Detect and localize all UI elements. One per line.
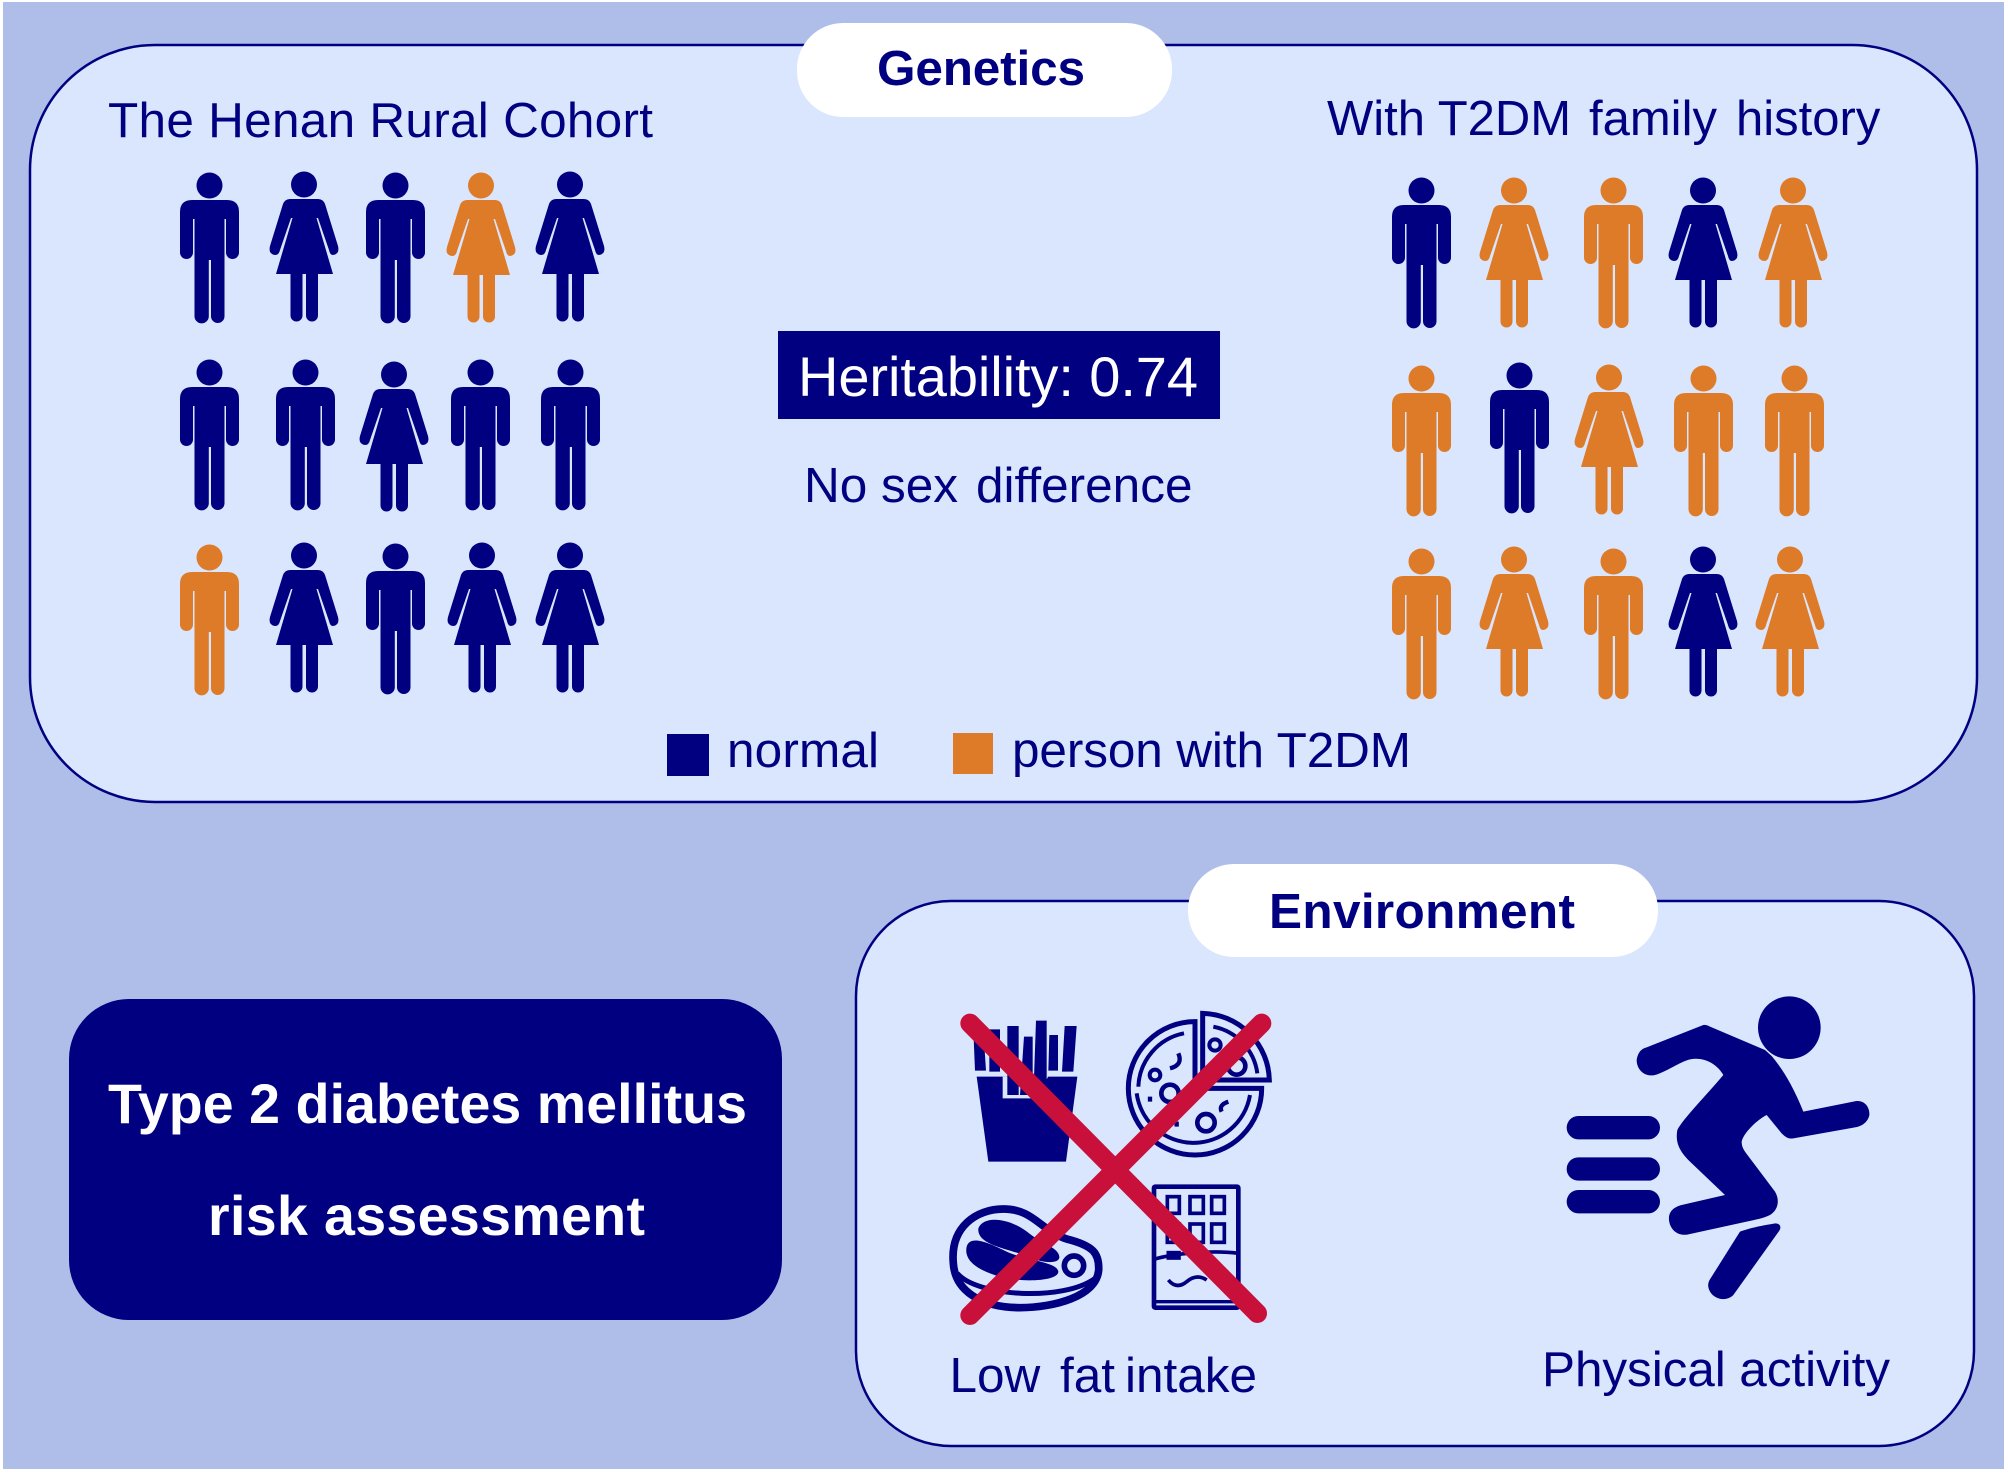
environment heading pill [1188,864,1658,957]
panel: type 2 diabetes mellitus risk assessment: risk assessment [208,1185,645,1247]
panel: genetics [30,23,1977,802]
panel: type 2 diabetes mellitus risk assessment: Type 2 diabetes mellitus [108,1073,747,1135]
pictogram: with T2DM family history, 11 of 15 with T2DM [1392,178,1827,699]
callout: heritability [778,331,1220,419]
legend: normal [727,723,879,778]
icon: runner [1567,996,1869,1299]
legend [667,723,1411,778]
text: physical activity: Physical activity [1542,1342,1890,1397]
legend: person with T2DM [1012,723,1411,778]
icon: steak [953,1209,1099,1308]
icon: chocolate bar [1154,1187,1238,1308]
text: no sex difference: difference [976,458,1192,513]
genetics heading pill: Genetics [877,41,1085,96]
text: low fat intake: intake [1125,1348,1257,1403]
icon: crossed-out fatty foods [953,1013,1269,1315]
heading: With T2DM family history: With T2DM [1327,92,1571,146]
pictogram: Henan Rural Cohort, 2 of 15 with T2DM [180,172,604,695]
icon: pizza [1128,1013,1269,1155]
genetics heading pill [797,23,1172,117]
panel: environment [856,864,1974,1446]
environment heading pill: Environment [1269,884,1575,939]
text: low fat intake: Low [950,1348,1040,1403]
text: low fat intake: fat [1060,1348,1115,1403]
heading: With T2DM family history: family [1589,92,1717,146]
red cross [970,1023,1262,1315]
text: no sex difference: No sex [804,458,958,513]
heading: The Henan Rural Cohort: The Henan Rural Cohort [108,93,653,148]
panel: type 2 diabetes mellitus risk assessment [69,999,782,1320]
callout: heritability: Heritability: 0.74 [798,345,1198,408]
icon: fries [973,1021,1077,1162]
heading: With T2DM family history: history [1736,92,1881,146]
